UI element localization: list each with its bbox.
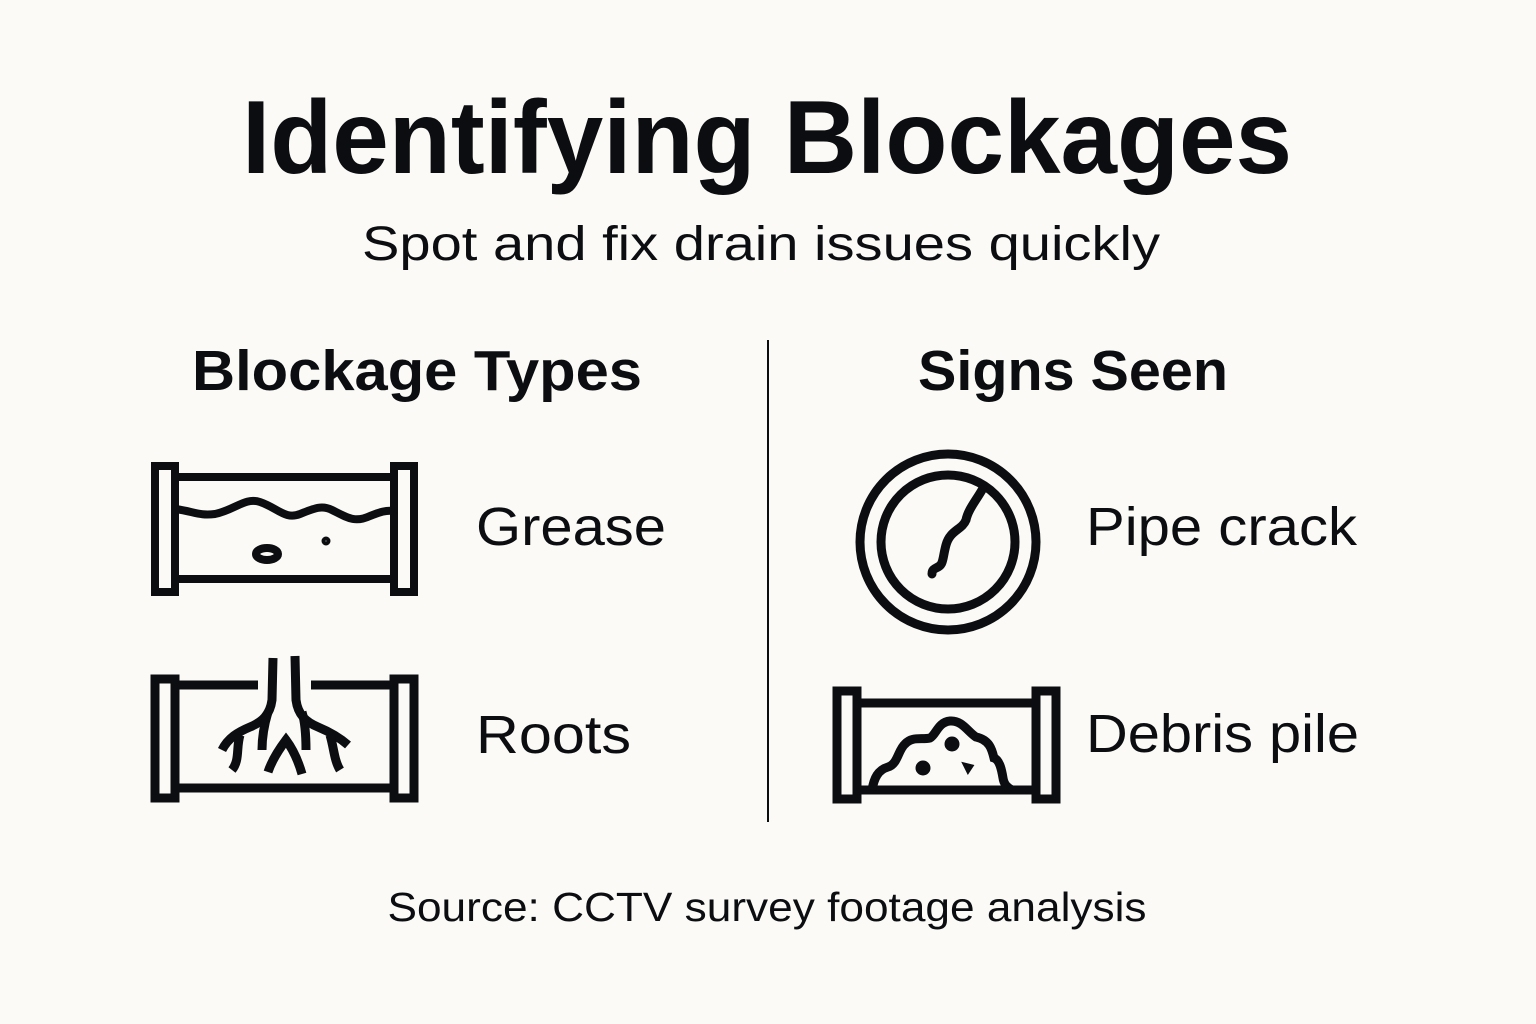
label: pipe crack: Pipe crack (1086, 497, 1358, 557)
icon: grease pipe (155, 466, 414, 592)
label: grease: Grease (476, 497, 666, 557)
icon: debris pipe (837, 691, 1056, 799)
heading: signs seen: Signs Seen (918, 339, 1228, 403)
label: debris pile: Debris pile (1086, 704, 1359, 764)
source note: Source: CCTV survey footage analysis (388, 884, 1146, 930)
icon: pipe crack (860, 454, 1036, 630)
subtitle: Spot and fix drain issues quickly (362, 218, 1160, 271)
label: roots: Roots (476, 705, 631, 765)
title: Identifying Blockages (242, 80, 1292, 196)
icon: roots pipe (155, 656, 414, 798)
heading: blockage types: Blockage Types (192, 339, 642, 403)
